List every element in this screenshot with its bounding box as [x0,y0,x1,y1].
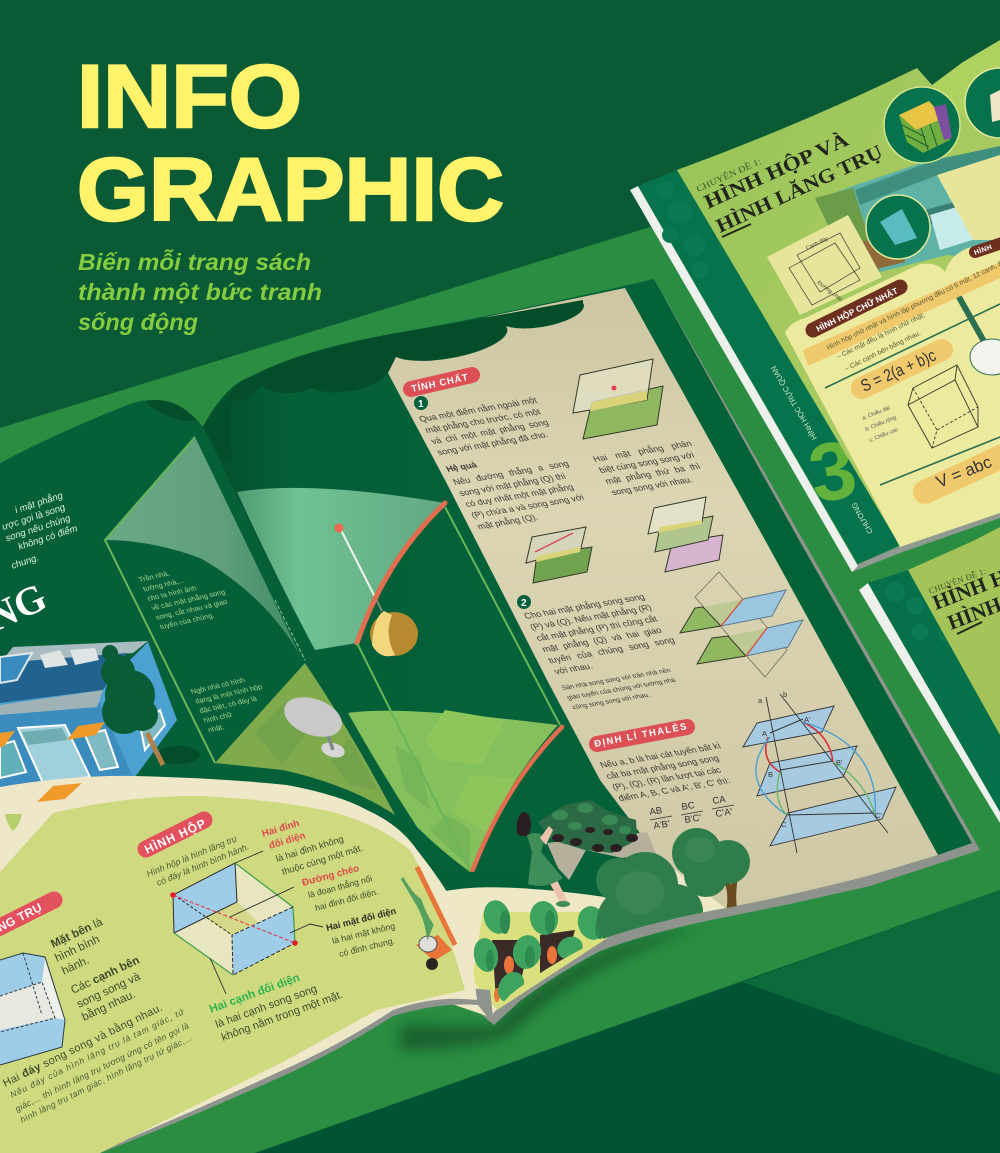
left page copy: chung. [11,552,40,572]
text block: thales: (P), (Q), (R) lần lượt tại các [610,765,723,792]
chapter number: 3 [802,423,863,521]
tree by building [101,645,200,765]
caption: ceiling: về các mặt phẳng song [150,587,227,612]
diagram: thales planes: B [768,770,773,779]
page [908,527,1000,735]
caption: ceiling: tuyến của chúng. [158,611,216,631]
right page fold lower strip [440,857,726,1017]
book title: HÌNH HỘP VÀ [701,128,853,214]
spine stripe [859,583,1000,823]
label: cạnh bên: bằng nhau. [80,988,137,1024]
lower green floor panel [348,711,558,872]
diagram: thales planes [743,690,896,853]
margin subject text: HÌNH HỌC TRỰC QUAN [769,364,819,442]
book title [695,128,886,238]
right page [201,279,972,1017]
plant pattern panel [472,912,615,1010]
icon: rubik cube [884,87,960,163]
text block: thales: cắt ba mặt phẳng song song [604,752,721,781]
properties text: – Các mặt đều là hình chữ nhật; [835,310,926,361]
callout: hai đỉnh đối diện: thuộc cùng một mặt. [281,843,364,877]
callout: đường chéo [301,863,379,913]
text block 2: Cho hai mặt phẳng song song [522,591,646,621]
card: second diagram [937,155,1000,240]
heading: hình hộp: HÌNH HỘP [142,815,208,857]
margin pattern [656,181,708,278]
label: cạnh bên [69,955,143,1024]
label: mặt bên: hành. [60,954,91,978]
thales formula: B'C' [684,812,702,826]
floor darker pattern [395,745,470,868]
subtitle [78,248,322,335]
diagram: thales planes: B' [836,758,843,767]
icon: third circle [965,68,1000,138]
main open book [0,279,980,1153]
caption: ceiling: Trần nhà, [137,569,171,584]
label: second heading: HÌNH [973,242,993,257]
chapter label: CHƯƠNG [849,501,875,536]
text block 1: Qua một điểm nằm ngoài một [417,395,539,424]
book shadow [400,925,700,1050]
title: GRAPHIC [77,139,504,239]
text block: corollary: song với mặt phẳng (Q) thì [457,470,568,498]
left light wall panel [105,437,300,655]
caption: house: dạng là một hình hộp [193,682,264,705]
diagram: two parallel planes cut [680,572,803,677]
diagram: thales planes: A [762,729,767,738]
caption: house: đặc biệt, có đáy là [198,694,259,715]
plant with mat [402,867,455,970]
label: cạnh bên: Các cạnh bên [69,955,141,997]
book: lower right [859,527,1000,823]
callout: hai cạnh đối diện: không nằm trong một mặt. [220,988,345,1044]
thales formula: C'A' [715,806,733,820]
note text: Sàn nhà song song với trần nhà nên [560,666,672,692]
small leaf shape [5,814,22,831]
card: cube definition [767,215,882,315]
tree canopy shadow [212,300,584,465]
volume formula: V = abc [933,452,995,492]
building [0,641,177,787]
subtitle: sống động [78,309,198,335]
text block 2: mặt phẳng (Q) và hai giao [540,625,663,654]
heading: tính chất: TÍNH CHẤT [410,372,469,395]
callout: hai mặt đối diện [325,906,397,959]
page block edge: lower page [80,980,494,1153]
diagram: prism [0,953,65,1065]
dashed fold [275,600,305,660]
lower page [0,776,477,1153]
text block: third plane: biệt cùng song song với [597,450,696,475]
page green line [445,507,560,725]
book bottom page edge [852,510,1000,572]
text: hai đáy: Hai đáy song song và bằng nhau. [1,1001,165,1090]
woman [517,812,570,907]
caption: ceiling: song, cắt nhau và giao [154,597,229,622]
left page [0,400,420,900]
label: mặt bên [49,916,105,978]
right page [932,40,1000,190]
caption: ceiling: tường nhà,... [141,576,186,593]
left page copy: song nếu chúng [5,513,71,544]
diagram: thales planes: b [783,690,787,699]
number 2 [517,595,531,609]
caption: house: nhật. [206,722,226,734]
surface area formula: S = 2(a + b)c [858,346,939,396]
pots and leaves [474,900,602,1002]
text block: third plane: mặt phẳng thứ ba thì [603,460,702,486]
text block 1: song với mặt phẳng đã cho. [435,429,550,457]
text block 2: (P) và (Q). Nếu mặt phẳng (R) [528,602,653,632]
left page copy: ược gọi là song [1,502,66,533]
heading: định lí thalès: ĐỊNH LÍ THALÈS [593,721,688,750]
note bubble [970,339,1000,375]
text block: corollary: có duy nhất một mặt phẳng [463,481,575,509]
left floor pattern [255,702,378,790]
diagram: line in plane [526,527,592,583]
book title: CHUYÊN ĐỀ 1: [695,156,763,194]
callout: hai mặt đối diện: Hai mặt đối diện [325,906,397,933]
text block 2: cắt mặt phẳng (P) thì cũng cắt [534,613,659,643]
properties text: – Các cạnh bên bằng nhau. [843,328,922,373]
number 1 [414,396,428,410]
box legend: b: Chiều rộng [865,415,897,433]
thales formula: BC [681,800,696,813]
text block 1: và chỉ một mặt phẳng song [429,417,550,446]
caption: ceiling: cho ta hình ảnh [146,583,198,603]
text block 2: tuyến của chúng song song [546,635,676,665]
text block: corollary: mặt phẳng (Q). [475,511,540,531]
table [279,690,347,760]
box legend [862,405,899,444]
label: hình hộp chữ nhật: HÌNH HỘP CHỮ NHẬT [814,284,900,334]
callout: hai đỉnh đối diện: là hai đỉnh không [275,834,345,864]
divider stem [955,290,986,345]
text block: thales: điểm A, B, C và A', B', C' thì: [616,776,732,803]
diagram: point and planes [573,359,663,439]
label: mặt bên: hình bình [53,934,102,965]
orange tile [37,783,82,802]
diagram: thales planes: C [781,820,787,829]
thales formula: A'B' [653,819,671,832]
white spine edge [630,186,858,572]
tree group [596,828,750,939]
cream text panel [388,288,938,908]
dark strip above lower fold [420,865,605,897]
label: mặt bên: Mặt bên là [49,916,105,951]
number 1: 1 [418,399,424,410]
text block: third plane: song song với nhau. [609,475,694,497]
left page copy: không có điểm [18,523,78,553]
caption: house: hình chữ [202,710,234,725]
thales formula: AB [649,805,663,818]
text: hai đáy: Nếu đáy của hình lăng trụ là tam giác, tứ [8,1006,186,1100]
callout: hai đỉnh đối diện [261,818,364,877]
thales formula: CA [712,794,727,807]
callout: đường chéo: Đường chéo [301,863,360,889]
box legend: c: Chiều cao [869,427,899,444]
definition: hình hộp: Hình hộp là hình lăng trụ [145,833,238,879]
callout: hai đỉnh đối diện: đối diện [268,830,307,852]
card: cube definition: Cạnh đáy [805,236,829,252]
definition: hình hộp: có đáy là hình bình hành. [155,841,250,888]
callout: hai mặt đối diện: có đỉnh chung. [338,935,396,959]
box legend: a: Chiều dài [862,405,891,422]
callout: đường chéo: là đoạn thẳng nối [307,872,373,900]
number 2: 2 [521,598,527,609]
label: cạnh bên: song song và [75,971,143,1011]
margin pattern [885,582,952,642]
flower shelf with plants [538,800,656,880]
diagram: thales planes: A' [804,715,811,724]
orange floor arc [472,727,562,872]
yellow formula panel [785,238,1000,547]
text block: thales: Nếu a, b là hai cát tuyến bất kì [598,741,723,770]
diagram: thales planes: a [758,696,763,705]
left page copy: i mặt phẳng [14,489,64,516]
page block edge: right page [440,279,980,1025]
title: INFO [77,46,302,146]
callout: hai đỉnh đối diện: Hai đỉnh [261,818,301,840]
orange ceiling arc [357,503,445,643]
text block 2: với nhau. [552,661,594,676]
callout: hai cạnh đối diện: Hai cạnh đối diện [208,972,302,1016]
caption: house: Ngôi nhà có hình [189,676,246,696]
text block: hệ quả: Hệ quả [444,460,479,474]
bottom right lighter facet [743,890,1000,1075]
diagram: three planes [648,497,723,572]
text block: corollary: Nếu đường thẳng a song [451,458,571,487]
book title: HÌNH LĂNG TRỤ [712,139,886,238]
text block 1: mặt phẳng cho trước, có một [423,406,543,435]
text block: third plane: Hai mặt phẳng phân [591,438,693,464]
note text: giao tuyến của chúng với tường nhà [565,675,677,701]
left page fold shadow [145,400,197,421]
book: top right [630,40,1000,572]
icon: milk carton [866,195,930,259]
left floor panel [215,663,395,815]
floor pattern [425,710,515,835]
dividers [825,304,1000,485]
diagram: parallelepiped [170,851,323,994]
thales formula [649,794,734,832]
text: hai đáy: hình lăng trụ tam giác, hình lăng trụ tứ giác,... [18,1033,194,1125]
light green wall panel [237,488,445,650]
bottom dark area [255,890,1000,1153]
callout: đường chéo: hai đỉnh đối diện. [314,886,379,913]
diagram: thales planes: C' [875,811,882,820]
callout: hai cạnh đối diện: là hai cạnh song song [214,983,319,1031]
subtitle: thành một bức tranh [78,279,322,305]
left wall outline [105,437,215,763]
text: hai đáy [1,1001,194,1125]
subtitle: Biến mỗi trang sách [78,248,311,275]
title: CHUYÊN ĐỀ 1: [927,566,987,596]
label: second heading [973,242,1000,257]
text block: corollary: (P) chứa a và song song với [469,493,586,520]
lamp [334,524,418,656]
text: hai đáy: giác,... thì hình lăng trụ tương ứng có tên gọi là [13,1021,191,1114]
orange stripe [803,262,1000,366]
left page [677,68,1000,546]
box diagram [908,365,978,448]
callout: hai mặt đối diện: là hai mặt không [331,921,396,946]
card: cube definition: Đường chéo [816,280,844,304]
lower page green panel [0,796,465,1153]
shop illustration [815,146,1000,272]
margin [868,570,1000,812]
spine margin [638,170,900,564]
note text: cũng song song với nhau. [571,692,652,711]
wall line [357,643,470,870]
title [77,46,504,239]
